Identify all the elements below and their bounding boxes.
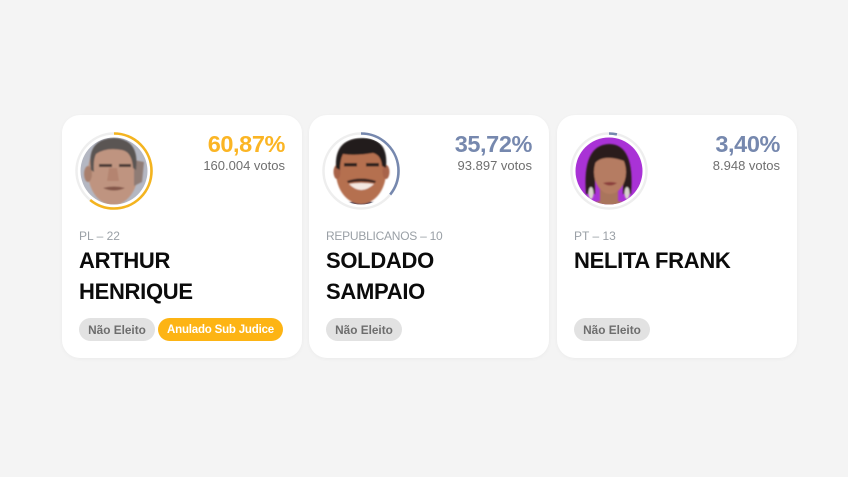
percentage: 60,87% xyxy=(208,131,285,157)
candidate name: SAMPAIO xyxy=(326,279,425,304)
candidate name xyxy=(79,248,193,304)
party: REPUBLICANOS – 10 xyxy=(326,229,442,243)
panel: Soldado Sampaio xyxy=(309,115,549,358)
status badge: Não Eleito xyxy=(583,323,641,337)
party: PT – 13 xyxy=(574,229,616,243)
status badge xyxy=(79,318,155,341)
party: PL – 22 xyxy=(79,229,120,243)
percentage: 3,40% xyxy=(715,131,780,157)
portrait with 3,40% vote ring xyxy=(570,132,648,210)
portrait with 35,72% vote ring xyxy=(322,132,400,210)
status badge: Não Eleito xyxy=(88,323,146,337)
status badge: annulled: Anulado Sub Judice xyxy=(167,324,274,336)
status badge: annulled xyxy=(158,318,283,341)
status badge xyxy=(326,318,402,341)
candidate name: HENRIQUE xyxy=(79,279,193,304)
votes: 8.948 votos xyxy=(713,158,780,173)
status badge xyxy=(574,318,650,341)
portrait with 60,87% vote ring xyxy=(76,132,153,210)
panel: Nelita Frank xyxy=(557,115,797,358)
candidate name: ARTHUR xyxy=(79,248,170,273)
candidate name: NELITA FRANK xyxy=(574,248,730,273)
candidate name xyxy=(326,248,434,304)
candidate name: SOLDADO xyxy=(326,248,434,273)
percentage: 35,72% xyxy=(455,131,532,157)
status badge: Não Eleito xyxy=(335,323,393,337)
votes: 160.004 votos xyxy=(203,158,285,173)
panel: Arthur Henrique xyxy=(62,115,302,358)
votes: 93.897 votos xyxy=(458,158,532,173)
